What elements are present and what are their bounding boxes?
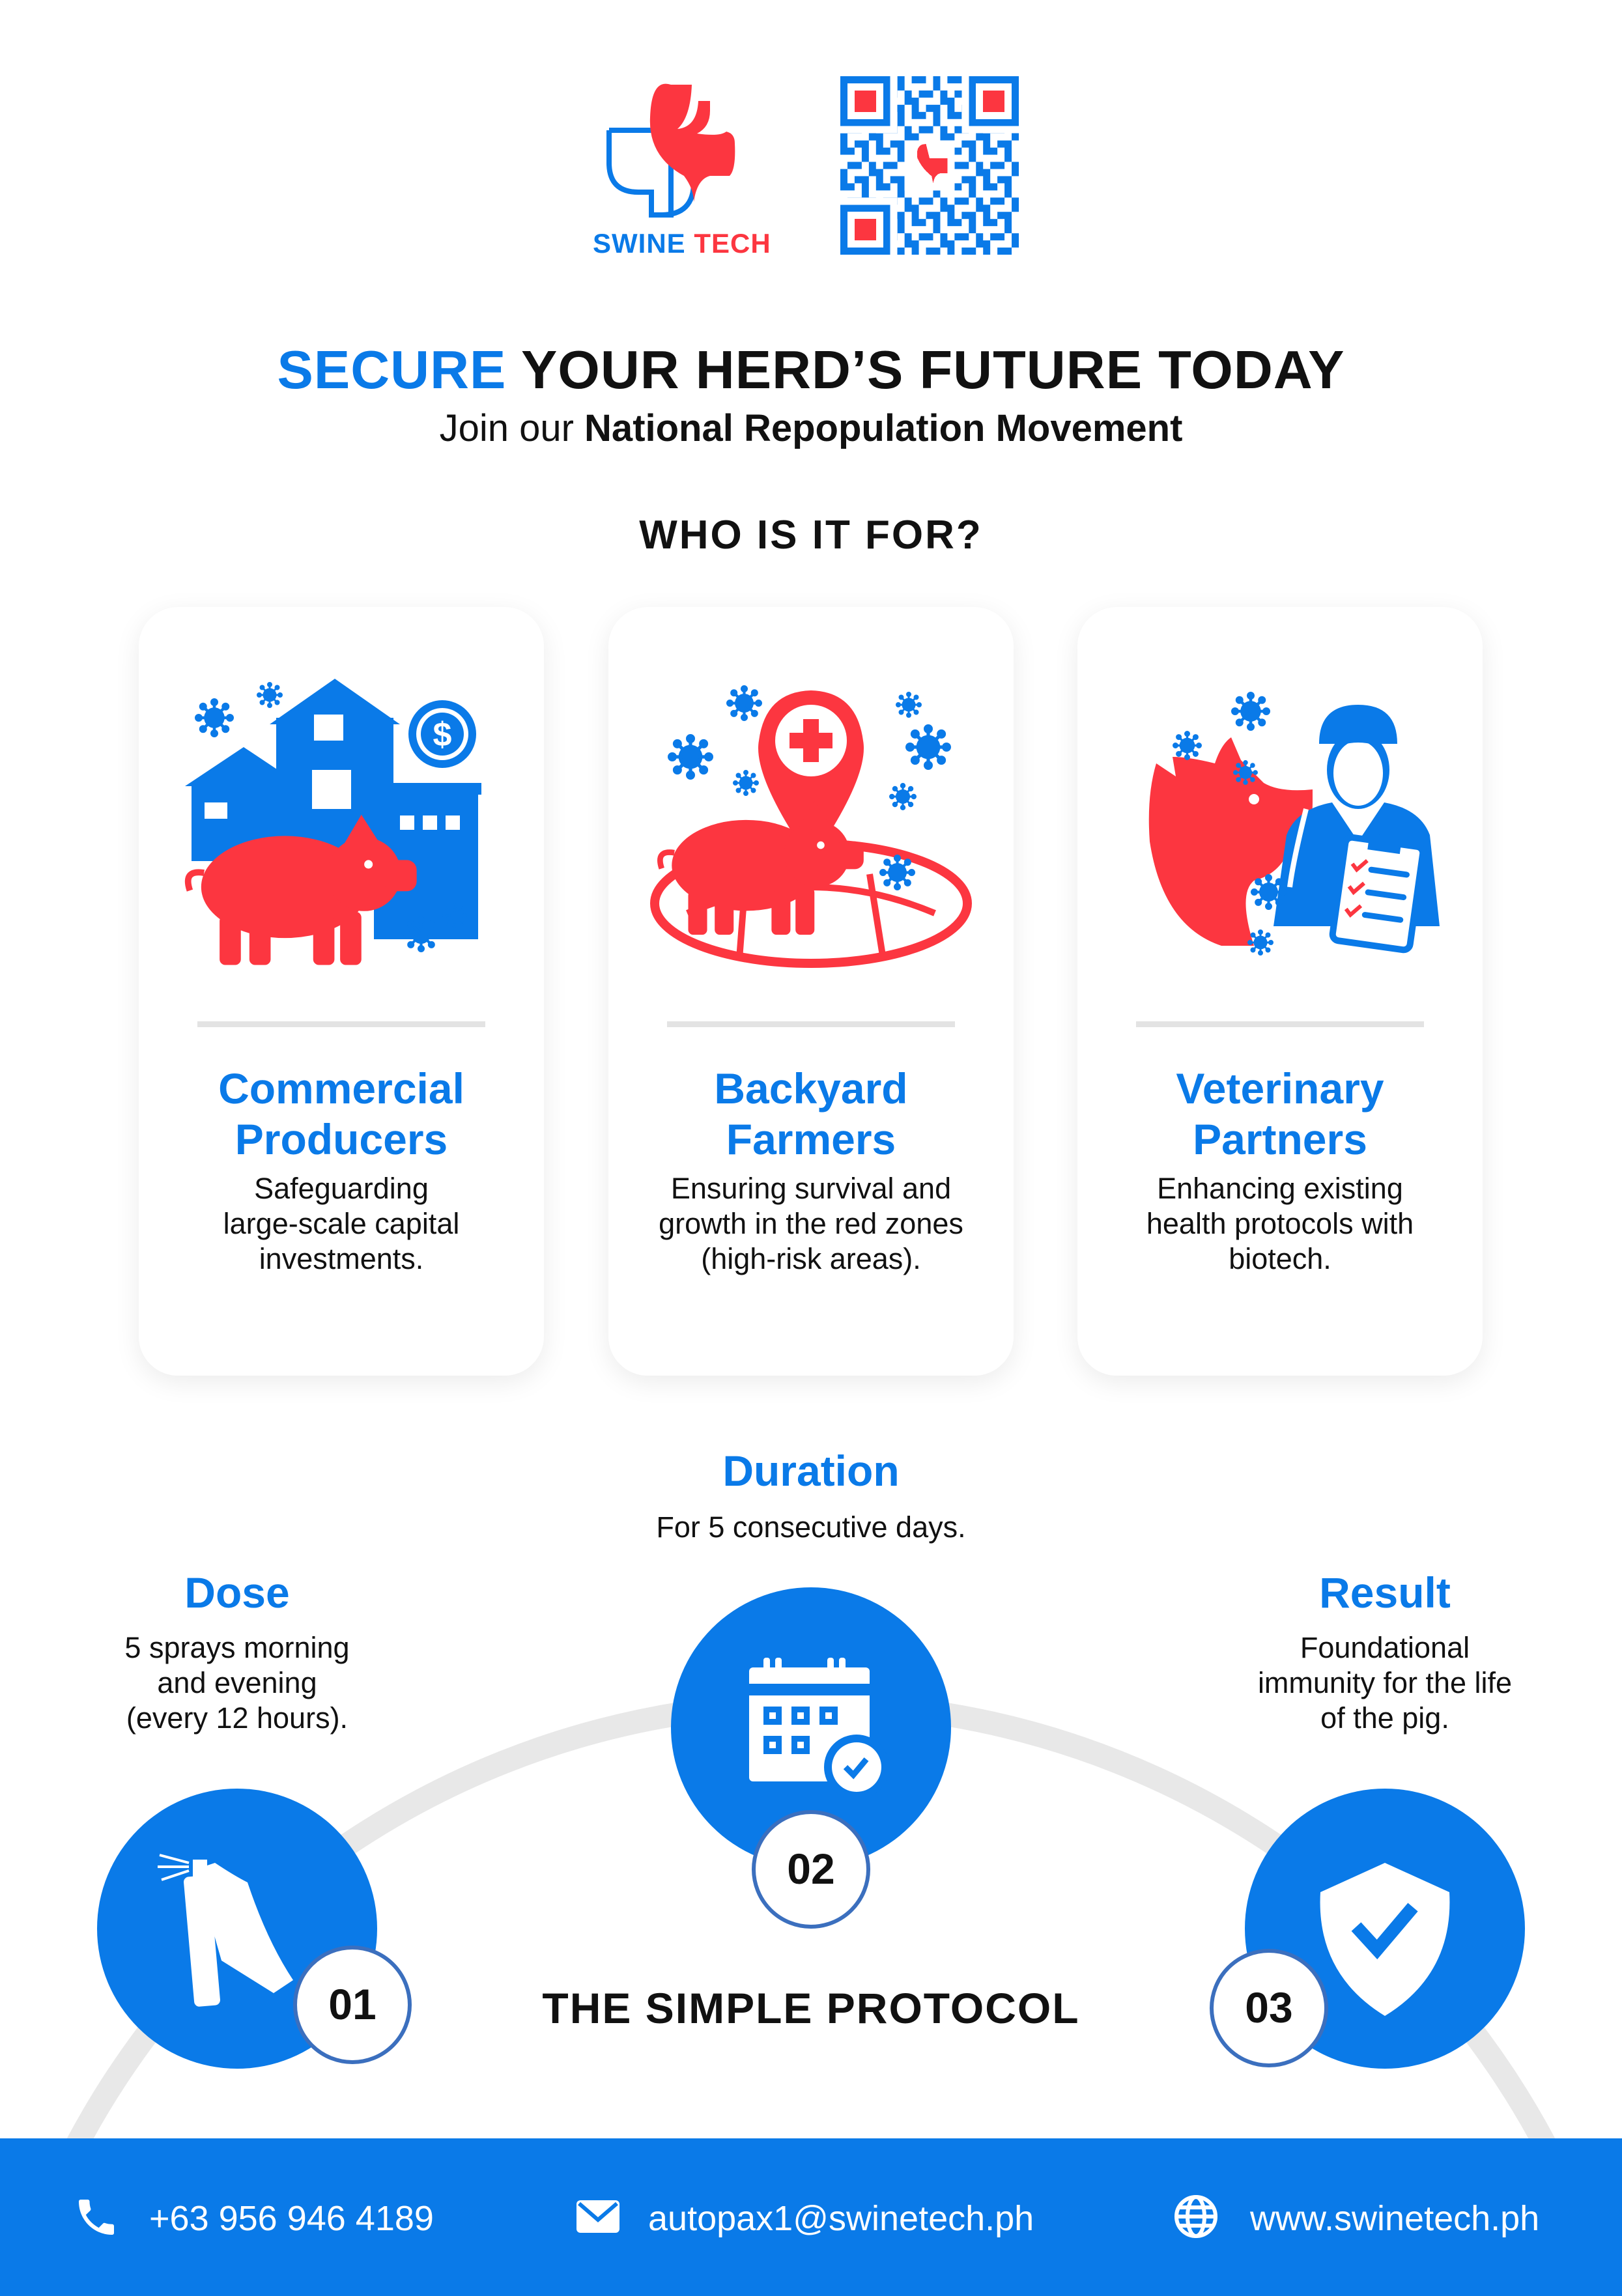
footer: website: www.swinetech.ph (1250, 2199, 1539, 2238)
card title: Backyard (714, 1064, 908, 1113)
heading: dose (124, 1568, 350, 1735)
dose text: (every 12 hours). (126, 1701, 348, 1735)
heading: dose: Dose (184, 1568, 290, 1617)
title: SECURE YOUR HERD’S FUTURE TODAY (277, 339, 1345, 400)
card text (1146, 1172, 1414, 1275)
icon: pin and pig (650, 685, 972, 968)
result text: immunity for the life (1258, 1666, 1512, 1699)
footer: email: autopax1@swinetech.ph (648, 2199, 1034, 2238)
dose text: 5 sprays morning (124, 1631, 350, 1664)
icon: pig and vet (1149, 692, 1440, 956)
icon: buildings and pig (185, 679, 481, 965)
result text: of the pig. (1320, 1701, 1449, 1735)
icon: spray bottle (158, 1855, 293, 2007)
badge 03 (1212, 1951, 1326, 2065)
logo text: SWINE TECH (593, 228, 771, 259)
dose text: and evening (157, 1666, 317, 1699)
step 03 circle (1212, 1789, 1525, 2069)
panel: veterinary partners (1077, 607, 1483, 1376)
card text (659, 1172, 963, 1275)
badge 02: 02 (787, 1845, 835, 1893)
panel: commercial producers (139, 607, 544, 1376)
icon: buildings and pig: $ (433, 716, 452, 754)
card title: Partners (1193, 1115, 1367, 1163)
heading: result: Result (1319, 1568, 1451, 1617)
qr code (840, 76, 1019, 255)
badge 03: 03 (1245, 1983, 1293, 2032)
footer bar (0, 2138, 1622, 2296)
badge 02 (754, 1812, 868, 1927)
protocol graphic (67, 1587, 1555, 2138)
logo (593, 83, 771, 259)
result text (1258, 1631, 1512, 1735)
icon: cross outline (609, 130, 694, 215)
card text: (high-risk areas). (701, 1242, 921, 1275)
card text: Safeguarding (254, 1172, 429, 1205)
card title (218, 1064, 464, 1163)
icon: calendar (749, 1658, 889, 1800)
icon: email (576, 2200, 619, 2233)
dose text (124, 1631, 350, 1735)
card text: biotech. (1229, 1242, 1331, 1275)
card text: Ensuring survival and (671, 1172, 951, 1205)
icon: globe (1174, 2195, 1217, 2238)
heading: duration (656, 1447, 966, 1544)
card title: Producers (235, 1115, 448, 1163)
heading: duration: Duration (722, 1447, 900, 1495)
icon: phone (79, 2200, 114, 2235)
card title: Farmers (726, 1115, 896, 1163)
card title (1176, 1064, 1384, 1163)
heading: result (1258, 1568, 1512, 1735)
panel: backyard farmers (608, 607, 1014, 1376)
protocol title: THE SIMPLE PROTOCOL (542, 1984, 1080, 2032)
badge 01: 01 (328, 1980, 377, 2028)
card title: Commercial (218, 1064, 464, 1113)
icon: pig head (650, 84, 735, 202)
subtitle: Join our National Repopulation Movement (440, 407, 1182, 449)
result text: Foundational (1300, 1631, 1470, 1664)
card text: health protocols with (1146, 1207, 1414, 1240)
duration text: For 5 consecutive days. (656, 1510, 966, 1544)
card text (223, 1172, 459, 1275)
icon: shield check (1320, 1863, 1449, 2016)
card text: investments. (259, 1242, 423, 1275)
step 01 circle (97, 1789, 410, 2069)
card title (714, 1064, 908, 1163)
card title: Veterinary (1176, 1064, 1384, 1113)
footer: phone: +63 956 946 4189 (149, 2199, 434, 2238)
badge 01 (295, 1948, 410, 2062)
card text: Enhancing existing (1157, 1172, 1403, 1205)
step 02 circle (671, 1587, 951, 1927)
card text: large-scale capital (223, 1207, 459, 1240)
section heading: who is it for: WHO IS IT FOR? (639, 513, 983, 558)
card text: growth in the red zones (659, 1207, 963, 1240)
